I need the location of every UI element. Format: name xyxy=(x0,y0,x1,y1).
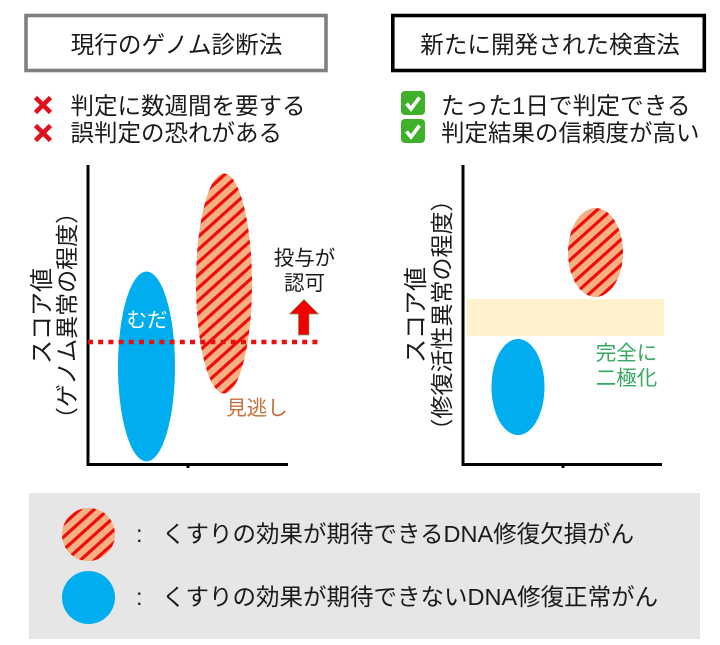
label: fully polarized: 二極化 xyxy=(596,367,657,390)
blue ellipse: repair-normal cancers xyxy=(118,272,175,462)
drawback list xyxy=(36,93,306,146)
heading box: new method: 新たに開発された検査法 xyxy=(420,32,680,59)
heading box: new method xyxy=(393,16,704,70)
panel: current genome diagnostics xyxy=(26,16,335,468)
legend item: repair-normal: くすりの効果が期待できないDNA修復正常がん xyxy=(162,584,658,610)
hatched ellipse: repair-deficient cancers xyxy=(196,174,252,394)
label: fully polarized xyxy=(596,342,657,390)
y axis label xyxy=(29,201,80,430)
separation band xyxy=(467,299,664,336)
benefit list: 判定結果の信頼度が高い xyxy=(441,120,700,146)
y axis label xyxy=(403,188,455,442)
label: approved for administration xyxy=(274,247,335,295)
legend item: repair-normal: : xyxy=(136,584,143,610)
heading box: current method xyxy=(26,16,326,70)
axes xyxy=(88,165,288,468)
blue ellipse: repair-normal cancers xyxy=(492,339,544,435)
hatched ellipse: repair-deficient cancers xyxy=(568,208,623,297)
heading box: current method: 現行のゲノム診断法 xyxy=(71,32,282,59)
threshold dotted line xyxy=(88,340,321,344)
drawback list: 誤判定の恐れがある xyxy=(70,120,282,146)
legend item: repair-deficient: : xyxy=(136,521,143,547)
benefit list: たった1日で判定できる xyxy=(441,93,691,120)
label: missed: 見逃し xyxy=(226,397,288,420)
label: approved for administration: 投与が xyxy=(274,247,335,270)
y axis label: （修復活性異常の程度） xyxy=(429,188,455,442)
y axis label: （ゲノム異常の程度） xyxy=(54,201,80,430)
panel: newly developed test xyxy=(393,16,704,468)
axes xyxy=(463,165,662,468)
chart: new method scores xyxy=(403,165,664,468)
icon: up arrow xyxy=(290,300,318,335)
legend item: repair-deficient xyxy=(62,508,634,561)
label: waste: むだ xyxy=(126,309,168,332)
legend item: repair-deficient: くすりの効果が期待できるDNA修復欠損がん xyxy=(162,521,634,547)
panel: legend xyxy=(29,493,700,639)
y axis label: スコア値 xyxy=(403,267,430,363)
chart: current method scores xyxy=(29,165,335,468)
drawback list: 判定に数週間を要する xyxy=(70,93,306,119)
y axis label: スコア値 xyxy=(29,268,56,364)
legend background xyxy=(29,493,700,639)
benefit list xyxy=(401,91,700,146)
legend item: repair-normal xyxy=(62,571,658,624)
label: fully polarized: 完全に xyxy=(596,342,657,365)
label: approved for administration: 認可 xyxy=(284,272,325,295)
